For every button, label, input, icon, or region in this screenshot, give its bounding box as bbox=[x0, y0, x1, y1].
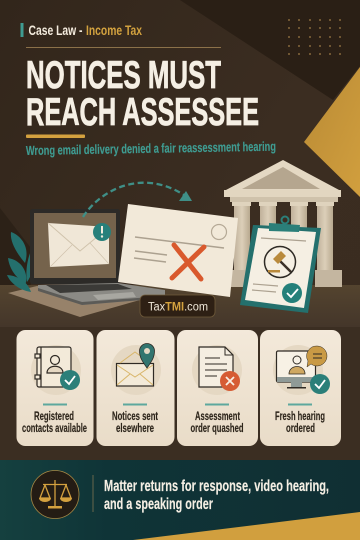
card 2: notices sent elsewhere: Notices sent bbox=[112, 411, 158, 423]
category label bbox=[20, 22, 142, 38]
gold corner bbox=[133, 512, 360, 540]
card 4: fresh hearing: ordered bbox=[286, 423, 315, 435]
card 2: notices sent elsewhere: elsewhere bbox=[116, 423, 154, 435]
brand badge: TaxTMI.com bbox=[148, 302, 208, 314]
icon: check badge bbox=[60, 370, 80, 390]
title bbox=[26, 54, 259, 134]
icon: gavel seal bbox=[264, 246, 296, 278]
icon: scales of justice bbox=[31, 470, 79, 518]
title: NOTICES MUST bbox=[26, 54, 221, 97]
card 1: registered contacts: contacts available bbox=[22, 423, 87, 435]
card 1: registered contacts bbox=[16, 330, 94, 446]
icon: alert badge bbox=[93, 223, 111, 241]
icon: address book bbox=[35, 347, 71, 387]
card 3: assessment quashed bbox=[177, 330, 258, 446]
brand badge bbox=[140, 295, 215, 317]
illustration: table surface bbox=[8, 286, 140, 317]
icon: video hearing monitor bbox=[276, 346, 330, 394]
bottom band bbox=[0, 460, 360, 540]
takeaway text bbox=[104, 478, 329, 513]
icon: envelope with pin bbox=[116, 344, 154, 386]
gold accent shape bbox=[304, 67, 360, 197]
card 1: registered contacts: Registered bbox=[34, 411, 74, 423]
icon: leaves bbox=[7, 232, 35, 292]
card 2: notices sent elsewhere bbox=[96, 330, 174, 446]
category label: Income Tax bbox=[86, 22, 142, 38]
arrow: dashed delivery path bbox=[83, 183, 192, 217]
card 4: fresh hearing: Fresh hearing bbox=[275, 411, 325, 423]
illustration: crossed-out envelope bbox=[118, 204, 238, 297]
card 3: assessment quashed: Assessment bbox=[195, 411, 240, 423]
icon: red cross bbox=[172, 245, 204, 279]
illustration: clipboard bbox=[240, 216, 321, 313]
icon: check badge bbox=[282, 283, 302, 303]
icon: document with cross bbox=[199, 347, 240, 391]
illustration: court building bbox=[224, 160, 342, 287]
title accent bar bbox=[26, 134, 85, 138]
card 3: assessment quashed: order quashed bbox=[190, 423, 244, 435]
takeaway text: and a speaking order bbox=[104, 496, 213, 513]
category label: Case Law - bbox=[28, 22, 83, 38]
card 4: fresh hearing bbox=[260, 330, 341, 446]
illustration: laptop bbox=[30, 209, 165, 305]
decorative dot grid bbox=[288, 19, 341, 55]
